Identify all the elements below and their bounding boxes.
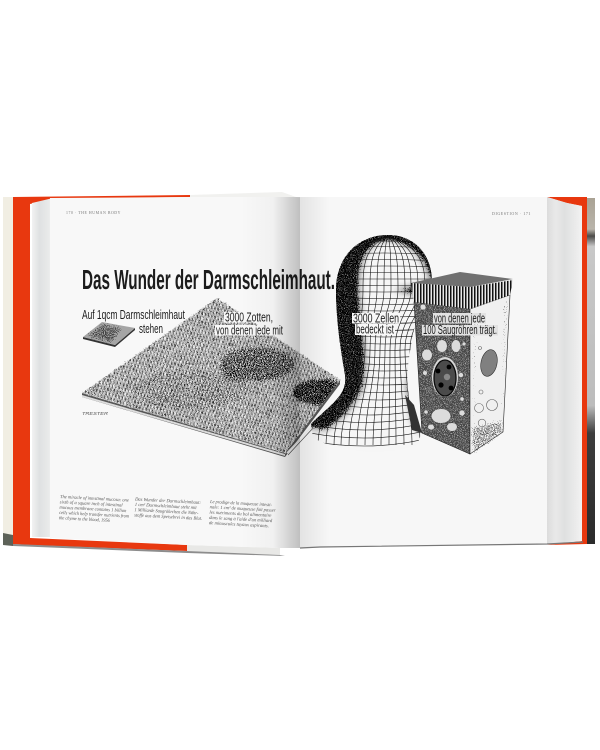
cell left face: [414, 302, 470, 454]
caption: English: [59, 495, 131, 525]
caption: English: the chyme to the blood, 1956: [59, 516, 111, 524]
left page edges: [32, 198, 53, 537]
label: 1 square cm: stehen: [139, 322, 163, 336]
caption: French: les nutriments du bol alimentaire: [209, 511, 271, 519]
caption: German: 1 Milliarde Saugröhrchen die Nähr-: [134, 508, 199, 516]
enlarged cell block: [405, 272, 513, 465]
microvilli brush: [411, 280, 513, 309]
caption: German: Das Wunder der Darmschleimhaut:: [134, 497, 201, 506]
bottom page edge line: [300, 542, 583, 548]
caption: French: [208, 500, 276, 530]
right page: [300, 197, 547, 549]
white label: 3000 Zotten: von denen jede mit: [216, 324, 283, 338]
left cover edge: [3, 192, 296, 556]
gutter shadow left: [240, 197, 300, 548]
caption: French: nale: 1 cm² de muqueuse fait passer: [210, 504, 276, 514]
caption: English: mucous membrane contains 1 billion: [59, 506, 127, 514]
open book spread: [3, 192, 595, 556]
caption: English: sixth of a square inch of intestinal: [60, 500, 123, 509]
caption: French: dans le sang à l'aide d'un milliard: [209, 516, 273, 524]
cell top surface: [411, 272, 513, 287]
large mucosa mat with villi: [82, 298, 350, 457]
running head left: 170 · THE HUMAN BODY: [66, 211, 121, 215]
label: 1 square cm: Auf 1qcm Darmschleimhaut: [82, 308, 185, 322]
villus dome with mesh: [311, 235, 432, 446]
caption: German: [133, 497, 203, 522]
running head right: DIGESTION · 171: [492, 212, 531, 216]
caption: French: Le prodige de la muqueuse intesti-: [209, 500, 272, 508]
left page: [50, 197, 300, 548]
gutter shadow right: [300, 197, 330, 548]
white label: 3000 Zellen: 3000 Zellen: [353, 312, 399, 326]
caption: English: The miracle of intestinal mucosa: one: [60, 495, 129, 504]
white label: 100 Saugroehren: [422, 312, 498, 337]
small mucosa square: [83, 322, 135, 347]
cell nucleus: [432, 357, 458, 397]
right page edges: [547, 197, 582, 544]
label: 1 square cm: [82, 308, 185, 336]
caption: French: de minuscules tuyaux aspirants.: [209, 521, 269, 529]
white label: 3000 Zotten: [215, 310, 284, 338]
caption: German: 1 cm² Darmschleimhaut steht mit: [135, 502, 198, 511]
white label: 100 Saugroehren: von denen jede: [434, 312, 485, 326]
white label: 3000 Zotten: 3000 Zotten,: [225, 310, 273, 324]
cell right face: [470, 295, 510, 456]
title: Das Wunder der Darmschleimhaut.: [82, 264, 335, 295]
white label: 3000 Zellen: [352, 312, 400, 336]
white label: 100 Saugroehren: 100 Saugröhren trägt.: [423, 323, 497, 337]
white label: 3000 Zellen: bedeckt ist: [356, 322, 394, 336]
cell vacuoles: [420, 304, 466, 431]
signature: Trester: TRESTER: [82, 411, 109, 416]
right cover edge: [547, 197, 595, 545]
caption: German: stoffe aus dem Speisebrei in das Blut.: [134, 513, 202, 522]
caption: English: cells which help transfer nutrients from: [59, 511, 130, 520]
